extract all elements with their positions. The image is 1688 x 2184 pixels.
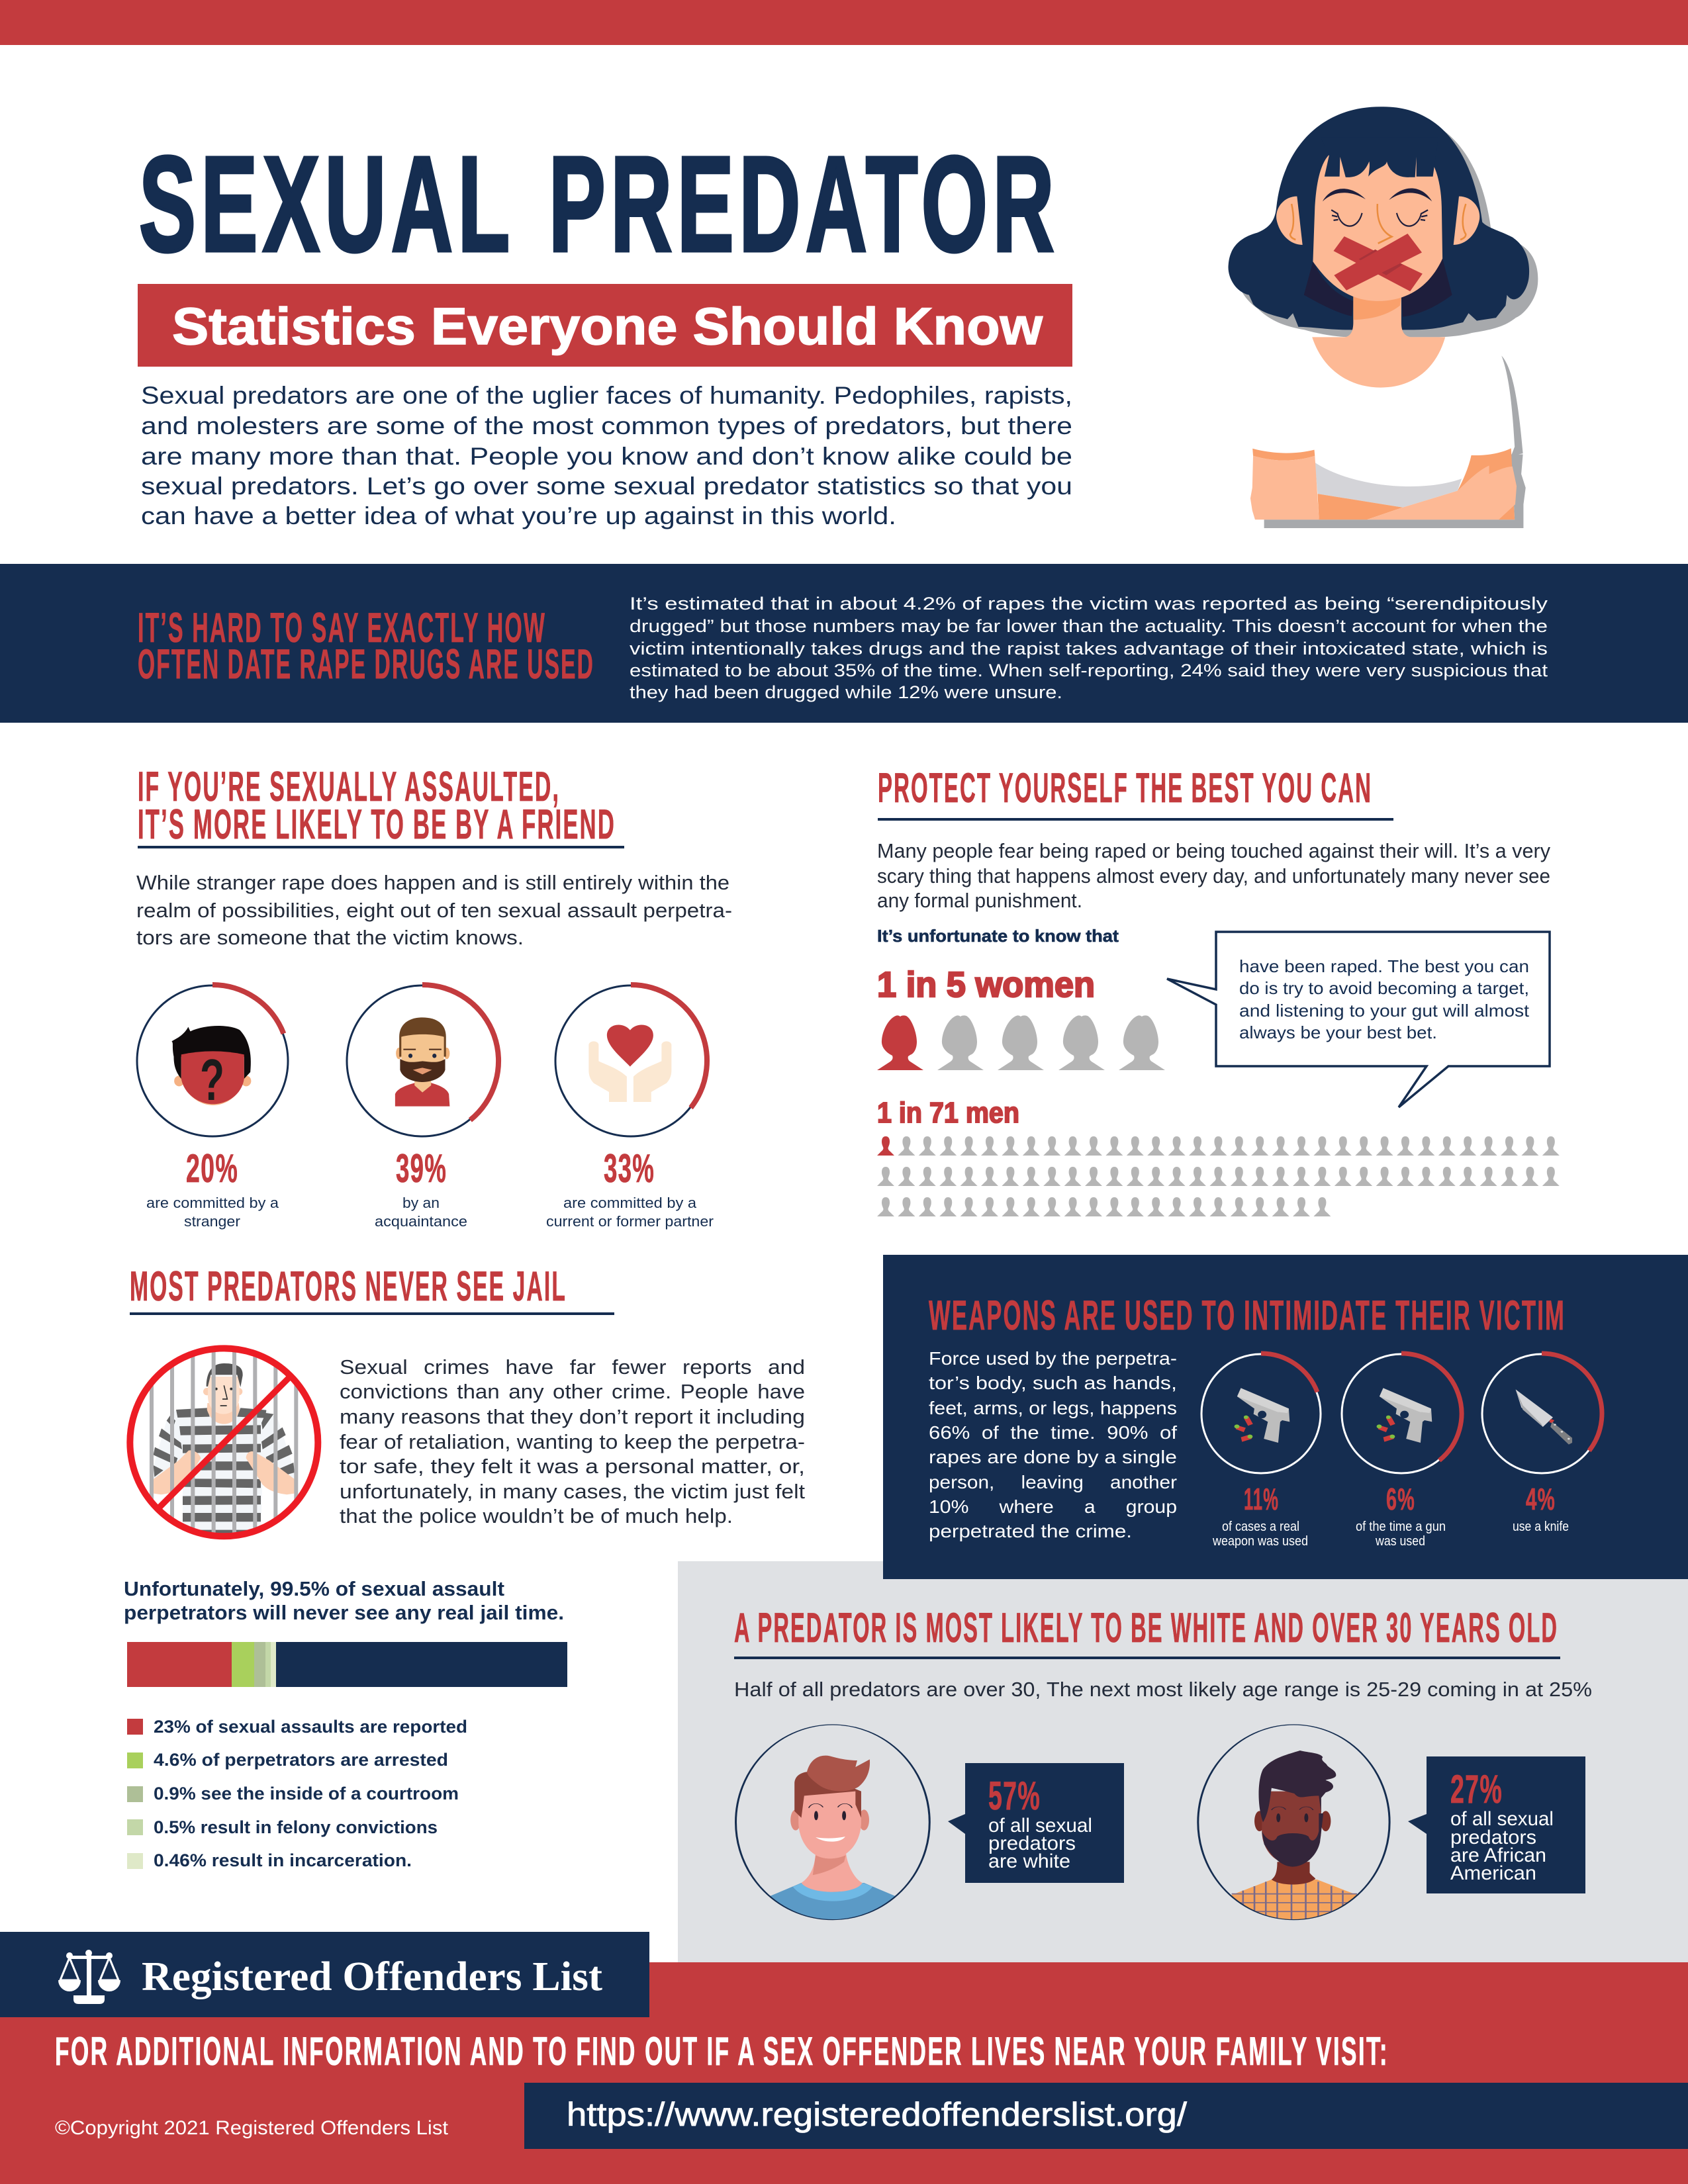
weapons paragraph: 10% where a group (929, 1496, 1177, 1517)
weapons paragraph: tor’s body, such as hands, (929, 1373, 1177, 1393)
body and upper arm (1317, 494, 1403, 520)
protect paragraph: scary thing that happens almost every day, and unfortunately many never see (877, 864, 1550, 887)
intro paragraph: and molesters are some of the most common types of predators, but there (141, 412, 1072, 439)
demographics text: Half of all predators are over 30, The next most likely age range is 25-29 coming in at 25% (734, 1678, 1592, 1701)
protect paragraph (877, 839, 1550, 912)
callout: 57%: predators (988, 1833, 1076, 1854)
bangs (1321, 137, 1438, 177)
callout: 27%: 27% (1450, 1767, 1503, 1811)
band paragraph: victim intentionally takes drugs and the rapist takes advantage of their intoxicated state, which is (630, 639, 1548, 659)
icon: scales of justice (58, 1950, 120, 2004)
intro paragraph: are many more than that. People you know and don’t know alike could be (141, 443, 1072, 470)
intro paragraph (141, 382, 1072, 529)
icon: pistol (1377, 1388, 1432, 1443)
stat: 39%: 39% (396, 1146, 447, 1191)
footer red panel (0, 1962, 1688, 2184)
intro paragraph: sexual predators. Let’s go over some sexual predator statistics so that you (141, 473, 1072, 500)
stat: 39%: acquaintance (375, 1213, 467, 1230)
stat: 20% (146, 1146, 279, 1230)
legend: 23% of sexual assaults are reported (154, 1717, 467, 1737)
section heading: friend: IT’S MORE LIKELY TO BE BY A FRIEND (138, 801, 616, 848)
stat: 4% (1513, 1482, 1569, 1534)
arms (154, 1450, 201, 1494)
ring (1198, 1725, 1389, 1920)
icon: bearded man (395, 1017, 449, 1107)
section heading: jail (130, 1263, 614, 1315)
callout: 27%: predators (1450, 1827, 1536, 1848)
stat: 39%: by an (402, 1195, 440, 1211)
icon: knife (1516, 1389, 1572, 1445)
stat: 4%: 4% (1526, 1482, 1556, 1516)
bars (150, 1350, 298, 1537)
prohibition ring (130, 1348, 318, 1536)
question mark: ? (200, 1047, 224, 1113)
shirt shadow (1501, 355, 1523, 456)
legend: 4.6% of perpetrators are arrested (154, 1750, 448, 1770)
prisoner shirt (154, 1408, 295, 1534)
weapons paragraph: perpetrated the crime. (929, 1521, 1132, 1541)
stat: 6%: of the time a gun (1356, 1520, 1446, 1534)
stat: 1 in 5 women: 1 in 5 women (877, 965, 1095, 1005)
stacked bar chart (127, 1642, 567, 1687)
donut: 39% acquaintance (347, 985, 498, 1136)
section heading: protect (878, 765, 1393, 821)
url box: https://www.registeredoffenderslist.org/ (567, 2096, 1187, 2133)
jail paragraph: that the police wouldn’t be of much help. (340, 1504, 733, 1527)
stat: 11%: 11% (1244, 1482, 1279, 1516)
stat: 4%: use a knife (1513, 1520, 1569, 1534)
neck (1312, 292, 1445, 388)
chart heading: Unfortunately, 99.5% of sexual assault (124, 1577, 504, 1600)
weapons paragraph: rapes are done by a single (929, 1447, 1177, 1467)
donut: 4% knife (1482, 1353, 1602, 1473)
band heading: OFTEN DATE RAPE DRUGS ARE USED (138, 641, 594, 688)
hair shadow (1237, 114, 1538, 338)
illustration: woman with taped mouth (1228, 107, 1538, 528)
legend (127, 1717, 467, 1870)
stat: 20%: 20% (186, 1146, 238, 1191)
donut: 6% gun (1342, 1353, 1462, 1473)
pictogram: men (877, 1136, 1560, 1216)
weapons paragraph (929, 1348, 1177, 1541)
protect paragraph: any formal punishment. (877, 889, 1082, 912)
legend: 0.46% result in incarceration. (154, 1850, 412, 1870)
stat: 11%: of cases a real (1222, 1520, 1299, 1534)
band heading (138, 605, 594, 688)
friend paragraph: While stranger rape does happen and is still entirely within the (136, 871, 729, 894)
arm left (1252, 449, 1315, 461)
under-hair shading (1304, 261, 1353, 316)
friend paragraph: tors are someone that the victim knows. (136, 926, 524, 949)
speech bubble (1167, 932, 1550, 1107)
jail paragraph: fear of retaliation, wanting to keep the perpetra- (340, 1430, 805, 1453)
stat: 20%: are committed by a (146, 1195, 279, 1211)
jail paragraph: tor safe, they felt it was a personal matter, or, (340, 1455, 805, 1478)
chart heading: perpetrators will never see any real jail time. (124, 1601, 564, 1624)
intro paragraph: can have a better idea of what you’re up against in this world. (141, 502, 896, 529)
stat: 6%: 6% (1386, 1482, 1415, 1516)
stat: 11% (1212, 1482, 1308, 1549)
section heading: friend (138, 764, 624, 848)
icon: hands holding heart (588, 1025, 671, 1102)
title: SEXUAL PREDATOR (139, 128, 1059, 280)
band paragraph: estimated to be about 35% of the time. When self-reporting, 24% said they were very suspicious that (630, 660, 1548, 680)
speech bubble: do is try to avoid becoming a target, (1239, 978, 1529, 998)
face (1313, 156, 1442, 301)
jail paragraph: unfortunately, in many cases, the victim just felt (340, 1480, 805, 1503)
speech bubble: and listening to your gut will almost (1239, 1001, 1530, 1021)
stat: 33% (546, 1146, 714, 1230)
eyebrows (1323, 189, 1366, 201)
arm shadow (1264, 454, 1526, 528)
protect paragraph: Many people fear being raped or being touched against their will. It’s a very (877, 839, 1550, 862)
lead-in: It’s unfortunate to know that (877, 926, 1119, 946)
panel: weapons (883, 1255, 1688, 1579)
stat: 33%: current or former partner (546, 1213, 714, 1230)
band paragraph: drugged” but those numbers may be far lower than the actuality. This doesn’t account for when the (630, 616, 1548, 636)
nose (1378, 204, 1391, 244)
weapons paragraph: feet, arms, or legs, happens (929, 1398, 1177, 1418)
weapons paragraph: Force used by the perpetra- (929, 1348, 1177, 1369)
jail paragraph (340, 1355, 805, 1527)
callout: 27% (1408, 1756, 1585, 1893)
speech bubble: always be your best bet. (1239, 1023, 1437, 1042)
friend paragraph: realm of possibilities, eight out of ten sexual assault perpetra- (136, 899, 732, 922)
stat: 6%: was used (1375, 1534, 1425, 1549)
url box (524, 2083, 1688, 2149)
stat: 6% (1356, 1482, 1446, 1549)
donut: 20% stranger (137, 985, 288, 1136)
footer logo bar (0, 1932, 649, 2017)
ears (1276, 197, 1303, 245)
band heading: IT’S HARD TO SAY EXACTLY HOW (138, 605, 546, 651)
stat: 11%: weapon was used (1212, 1534, 1308, 1549)
top red bar (0, 0, 1688, 45)
legend: 0.5% result in felony convictions (154, 1817, 438, 1837)
chart heading (124, 1577, 564, 1624)
band paragraph: they had been drugged while 12% were unsure. (630, 682, 1062, 702)
intro paragraph: Sexual predators are one of the uglier faces of humanity. Pedophiles, rapists, (141, 382, 1072, 409)
portrait: white man (736, 1725, 929, 1921)
head (207, 1403, 240, 1424)
icon: pistol (1235, 1388, 1289, 1443)
icon: faceless stranger (171, 1026, 251, 1105)
undershirt (1315, 463, 1462, 508)
navy band (0, 564, 1688, 723)
subtitle banner: Statistics Everyone Should Know (172, 296, 1043, 355)
callout: 57% (948, 1763, 1124, 1883)
subtitle banner (138, 284, 1072, 367)
stat: 20%: stranger (184, 1213, 240, 1230)
hair (1228, 107, 1529, 330)
tape (1334, 236, 1423, 291)
icon: prisoner behind bars with prohibition sign (130, 1348, 318, 1537)
section heading: friend: IF YOU’RE SEXUALLY ASSAULTED, (138, 764, 560, 810)
speech bubble: have been raped. The best you can (1239, 956, 1529, 976)
pictogram: women (877, 1015, 1165, 1070)
band paragraph (630, 594, 1548, 702)
callout: 57%: are white (988, 1850, 1070, 1872)
closed eyes (1331, 210, 1428, 226)
footer logo bar: Registered Offenders List (142, 1954, 602, 1999)
weapons paragraph: person, leaving another (929, 1472, 1177, 1492)
friend paragraph (136, 871, 732, 949)
portrait: black man (1198, 1725, 1389, 1921)
donut: 11% real weapon (1201, 1353, 1321, 1473)
callout: 27%: of all sexual (1450, 1808, 1554, 1830)
callout: 27%: are African (1450, 1844, 1546, 1866)
jail paragraph: convictions than any other crime. People have (340, 1380, 805, 1403)
copyright: ©Copyright 2021 Registered Offenders List (55, 2117, 449, 2139)
jail paragraph: many reasons that they don’t report it including (340, 1405, 805, 1428)
callout: 57%: 57% (988, 1774, 1041, 1818)
stat: 1 in 71 men: 1 in 71 men (877, 1097, 1019, 1129)
ring (736, 1725, 929, 1920)
donut: 33% partner (555, 985, 707, 1136)
callout: 27%: American (1450, 1862, 1536, 1884)
stat: 33%: 33% (604, 1146, 655, 1191)
section heading: jail: MOST PREDATORS NEVER SEE JAIL (130, 1263, 567, 1310)
legend: 0.9% see the inside of a courtroom (154, 1784, 459, 1803)
weapons paragraph: 66% of the time. 90% of (929, 1422, 1177, 1443)
panel: demographics (678, 1561, 1688, 1962)
jail paragraph: Sexual crimes have far fewer reports and (340, 1355, 805, 1379)
band paragraph: It’s estimated that in about 4.2% of rapes the victim was reported as being “serendipitously (630, 594, 1548, 614)
stat: 39% (375, 1146, 467, 1230)
callout: 57%: of all sexual (988, 1815, 1092, 1837)
stat: 33%: are committed by a (563, 1195, 697, 1211)
forearm (1367, 465, 1517, 520)
shirt (1241, 337, 1515, 489)
